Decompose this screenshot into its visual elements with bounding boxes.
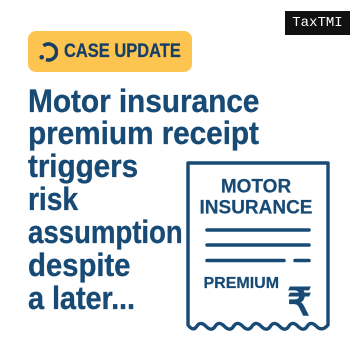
icon: refresh circle	[39, 42, 58, 62]
title: a later...	[28, 280, 135, 316]
title: Motor insurance	[28, 83, 259, 119]
icon: insurance receipt: MOTOR	[221, 176, 291, 198]
badge label: CASE UPDATE	[64, 41, 181, 62]
title: despite	[28, 247, 130, 283]
title: risk	[28, 181, 78, 217]
title	[28, 83, 259, 316]
watermark: TaxTMI	[285, 11, 350, 35]
title: triggers	[28, 148, 138, 184]
icon: insurance receipt: ₹	[287, 280, 312, 324]
title: assumption	[28, 214, 183, 250]
icon: insurance receipt: PREMIUM	[204, 275, 279, 292]
icon: insurance receipt	[186, 161, 330, 331]
title: premium receipt	[28, 115, 259, 151]
icon: insurance receipt: INSURANCE	[200, 198, 312, 218]
badge: case update	[28, 31, 192, 72]
watermark: TaxTMI: TaxTMI	[292, 15, 343, 31]
